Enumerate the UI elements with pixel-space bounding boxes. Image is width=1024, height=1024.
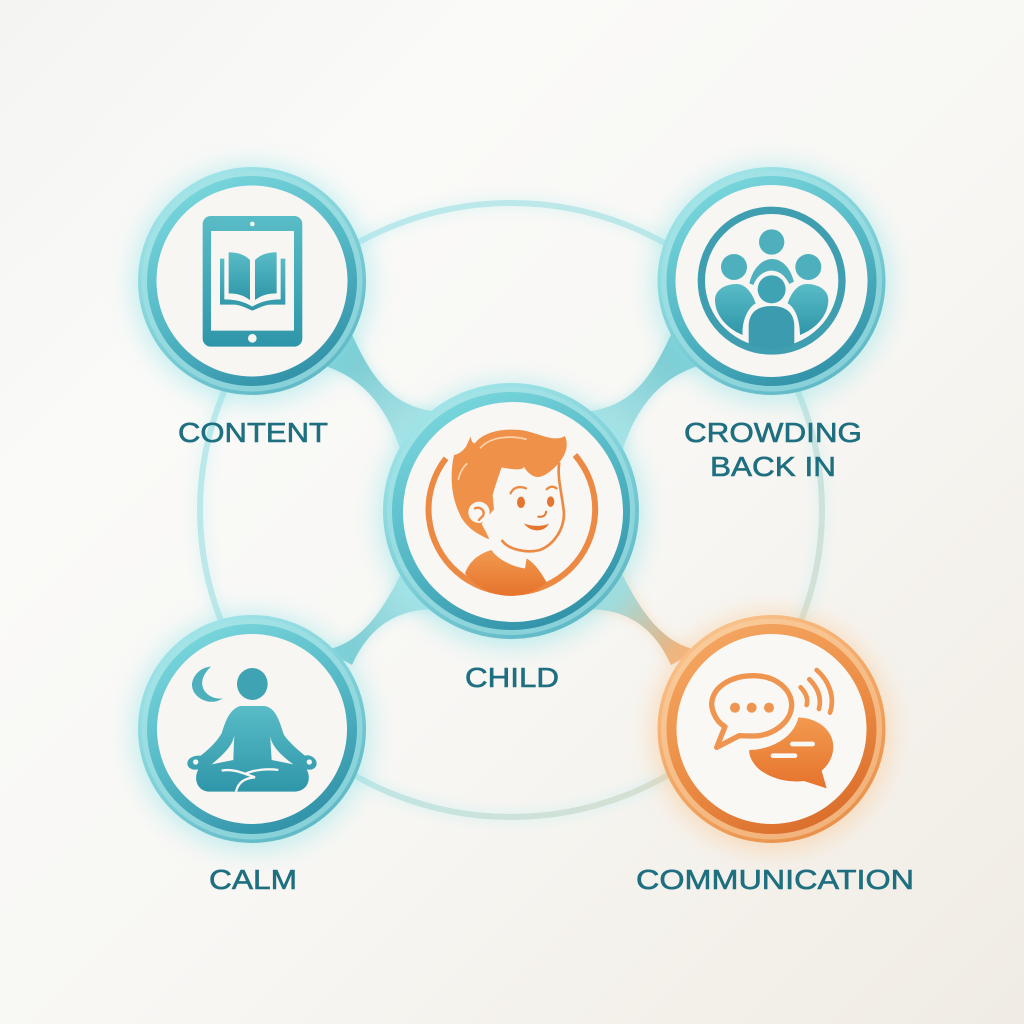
connectors from child to outer nodes <box>322 330 701 665</box>
label: crowding back in <box>684 417 862 482</box>
label: crowding back in: CROWDING <box>684 417 862 448</box>
label: crowding back in: BACK IN <box>710 451 836 482</box>
icon: group of people <box>701 210 842 351</box>
label: calm: CALM <box>209 864 297 895</box>
label: child: CHILD <box>465 662 559 693</box>
node: child <box>380 383 642 646</box>
label: communication: COMMUNICATION <box>636 864 914 895</box>
label: content: CONTENT <box>178 417 328 448</box>
icon: smiling boy portrait <box>429 430 595 596</box>
network ring connecting nodes <box>200 203 822 817</box>
icon: speech bubbles <box>712 670 833 788</box>
icon: meditating person with moon <box>187 667 317 792</box>
node: crowding back in <box>654 166 890 402</box>
icon: tablet with book <box>203 216 302 347</box>
node: content <box>134 166 370 402</box>
node: calm <box>134 614 370 850</box>
node: communication <box>654 614 890 850</box>
